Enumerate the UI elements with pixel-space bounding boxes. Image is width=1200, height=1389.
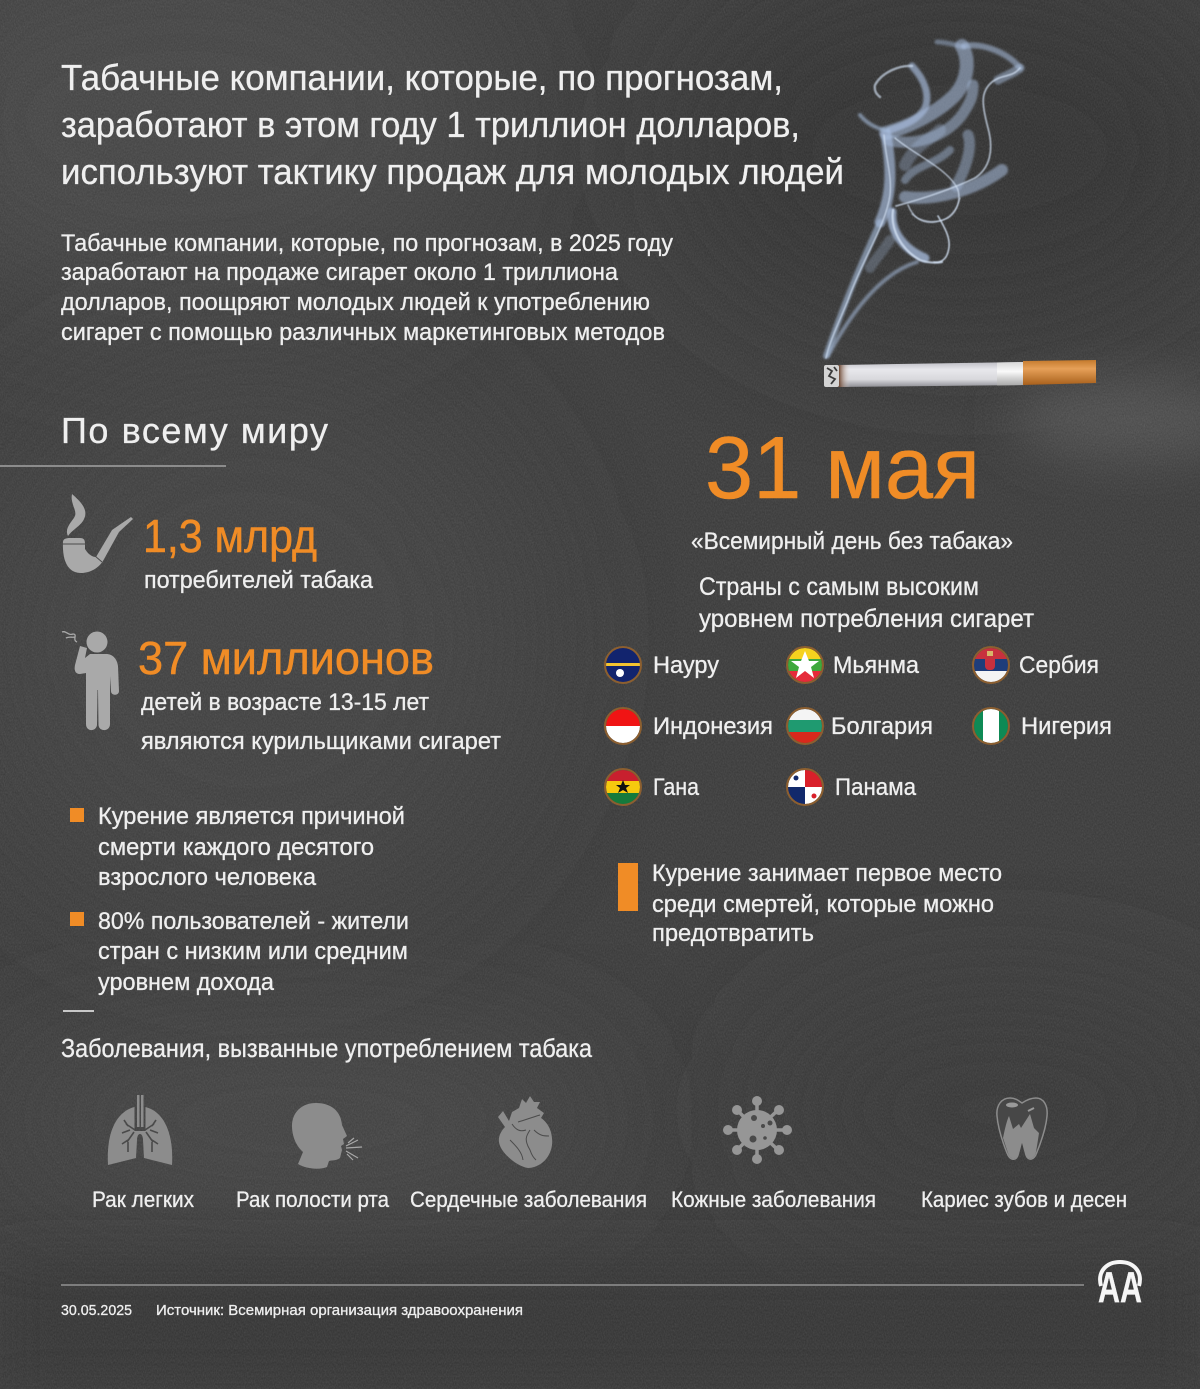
intro text block (61, 230, 673, 346)
Nauru (605, 647, 719, 683)
Nigeria: Нигерия (1021, 713, 1112, 740)
intro text block: Табачные компании, которые, по прогнозам, в 2025 году (61, 230, 673, 257)
icon: head with spray (292, 1103, 362, 1169)
bullet: cause of death: Курение является причиной (98, 803, 405, 830)
illustration: cigarette smoke (826, 42, 1020, 358)
subheading: world no tobacco day: «Всемирный день без табака» (691, 528, 1013, 555)
Serbia: Сербия (1019, 652, 1099, 679)
icon: lungs (108, 1095, 172, 1165)
heading: countries: Страны с самым высоким (699, 573, 979, 601)
heading: diseases: Заболевания, вызванные употреблением табака (61, 1033, 592, 1063)
bullet: cause of death: смерти каждого десятого (98, 834, 374, 861)
Myanmar (787, 647, 920, 683)
intro text block: сигарет с помощью различных маркетинговых методов (61, 319, 665, 346)
callout: leading preventable death: предотвратить (652, 920, 814, 947)
label: Сердечные заболевания (410, 1187, 647, 1212)
callout: leading preventable death: среди смертей, которые можно (652, 891, 994, 918)
bullet: low income countries (70, 908, 409, 996)
stat: tobacco users (63, 494, 374, 594)
title: Табачные компании, которые, по прогнозам, (61, 57, 783, 98)
disease: tooth decay (921, 1098, 1127, 1212)
Bulgaria (787, 708, 933, 744)
Serbia (973, 647, 1099, 683)
logo: AA: AA (1098, 1263, 1142, 1312)
date heading: 31 May: 31 мая (705, 418, 980, 517)
Bulgaria: Болгария (831, 713, 933, 740)
label: Кариес зубов и десен (921, 1187, 1127, 1212)
stat: child smokers (62, 632, 501, 755)
intro text block: долларов, поощряют молодых людей к употреблению (61, 289, 650, 316)
country list with flags (605, 647, 1112, 805)
caption: детей в возрасте 13-15 лет (141, 689, 429, 716)
Ghana (605, 769, 700, 805)
footer (61, 1284, 1084, 1319)
source: Источник: Всемирная организация здравоохранения (156, 1303, 523, 1319)
date: 30.05.2025 (61, 1303, 132, 1319)
disease: lung cancer (92, 1095, 194, 1212)
Panama: Панама (835, 774, 917, 801)
bullet: low income countries: уровнем дохода (98, 969, 275, 996)
bullet: cause of death (70, 803, 405, 891)
caption (141, 689, 501, 755)
label: Рак легких (92, 1187, 194, 1212)
bullet: low income countries: стран с низким или средним (98, 938, 408, 965)
icon: tooth (997, 1098, 1047, 1159)
bullet: cause of death: взрослого человека (98, 864, 317, 891)
heading: countries (699, 573, 1035, 633)
Indonesia (605, 708, 773, 744)
caption: потребителей табака (144, 567, 374, 594)
callout: leading preventable death (618, 860, 1002, 947)
disease: mouth cancer (236, 1103, 390, 1212)
title: используют тактику продаж для молодых людей (61, 151, 844, 192)
label: Рак полости рта (236, 1187, 390, 1212)
bullet: low income countries: 80% пользователей - жители (98, 908, 409, 935)
Ghana: Гана (653, 774, 700, 801)
disease: heart disease (410, 1096, 647, 1212)
intro text block: заработают на продаже сигарет около 1 триллиона (61, 259, 619, 286)
icon: smoking man (62, 632, 119, 730)
icon: heart (498, 1096, 552, 1168)
value: 37 миллионов (138, 632, 434, 684)
Panama (787, 769, 917, 805)
heading: countries: уровнем потребления сигарет (699, 605, 1035, 633)
icon: pipe (63, 494, 133, 573)
Nigeria (973, 708, 1112, 744)
disease: skin disease (671, 1096, 876, 1212)
title: заработают в этом году 1 триллион долларов, (61, 104, 800, 145)
Myanmar: Мьянма (833, 652, 920, 679)
logo: AA (1098, 1262, 1142, 1312)
caption: являются курильщиками сигарет (141, 728, 501, 755)
icon: virus (723, 1096, 792, 1164)
Indonesia: Индонезия (653, 713, 773, 740)
title (61, 57, 844, 192)
label: Кожные заболевания (671, 1187, 876, 1212)
callout: leading preventable death: Курение занимает первое место (652, 860, 1002, 887)
value: 1,3 млрд (143, 510, 317, 562)
illustration: cigarette (824, 360, 1096, 387)
Nauru: Науру (653, 652, 719, 679)
heading: worldwide: По всему миру (61, 410, 328, 451)
